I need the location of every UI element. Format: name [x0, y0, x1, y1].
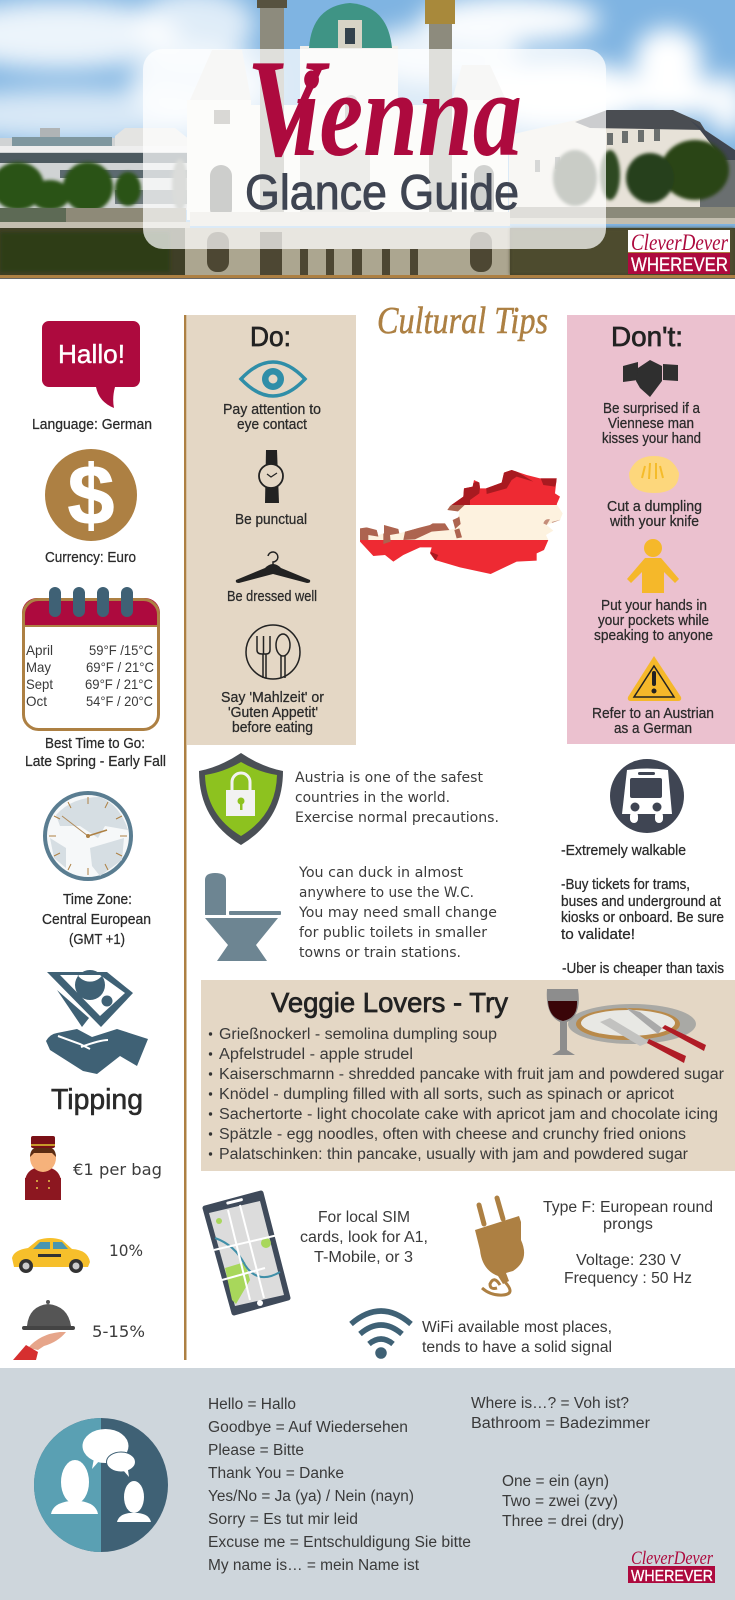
text: safety — [295, 770, 499, 826]
text: austrian: Refer to an Austrian — [592, 706, 714, 722]
text: power specs: Frequency : 50 Hz — [564, 1270, 692, 1287]
text: pockets: Put your hands in — [601, 598, 707, 614]
icon: phone with map — [205, 1193, 288, 1313]
text: kiss hand: Viennese man — [608, 416, 694, 432]
text: common phrases: Please = Bitte — [208, 1442, 304, 1459]
heading: do: Do: — [250, 321, 291, 352]
left column divider — [184, 315, 186, 1360]
text: power specs: prongs — [603, 1216, 653, 1233]
icon: person — [627, 539, 679, 593]
text: sim cards: T-Mobile, or 3 — [314, 1249, 413, 1266]
text: safety: Austria is one of the safest — [295, 770, 483, 786]
label: best time to go — [25, 736, 166, 770]
title: Vienna: ienna — [292, 47, 522, 182]
text: power specs: Voltage: 230 V — [576, 1252, 682, 1269]
text: bag tip: €1 per bag — [73, 1160, 162, 1179]
calendar with weather table: April — [26, 642, 53, 658]
list: veggie dishes: Kaiserschmarnn - shredded pancake with fruit jam and powdered sugar — [219, 1066, 724, 1083]
heading: tipping: Tipping — [51, 1084, 143, 1116]
text: mahlzeit: 'Guten Appetit' — [228, 705, 318, 721]
text: sim cards: For local SIM — [318, 1209, 410, 1226]
text: sim cards — [300, 1209, 428, 1266]
icon: dollar coin — [45, 448, 137, 542]
calendar with weather table: May — [26, 659, 51, 675]
text: common phrases: Thank You = Danke — [208, 1465, 344, 1482]
list: veggie dishes: Knödel - dumpling filled with all sorts, such as spinach or apricot — [219, 1086, 675, 1103]
text: eye contact — [223, 402, 321, 433]
text: mahlzeit — [221, 690, 324, 736]
right buildings — [509, 110, 735, 215]
text: common phrases: Goodbye = Auf Wiedersehen — [208, 1419, 408, 1436]
label: time zone: (GMT +1) — [69, 932, 125, 948]
label: language: Language: German — [32, 417, 152, 433]
text: kiss hand — [602, 401, 701, 447]
icon: two people talking — [34, 1418, 168, 1552]
text: transport: kiosks or onboard. Be sure — [561, 910, 724, 926]
icon: wall clock — [45, 793, 131, 879]
calendar with weather table: 69°F / 21°C — [86, 659, 154, 675]
text: transport: -Uber is cheaper than taxis — [562, 961, 724, 977]
map: Austria flag — [360, 470, 562, 574]
text: directions: Bathroom = Badezimmer — [471, 1415, 650, 1432]
list: veggie dishes — [209, 1026, 724, 1163]
logo: CleverDever Wherever (bottom) — [628, 1548, 715, 1585]
panel: don't — [567, 315, 735, 744]
text: taxi tip: 10% — [109, 1241, 143, 1260]
icon: fork and spoon — [246, 625, 300, 679]
text: kiss hand: Be surprised if a — [603, 401, 701, 417]
text: transport: -Buy tickets for trams, — [561, 877, 690, 893]
text: common phrases: Hello = Hallo — [208, 1396, 296, 1413]
text: numbers — [502, 1473, 624, 1530]
calendar with weather table: 54°F / 20°C — [86, 693, 153, 709]
text: transport: -Extremely walkable — [561, 843, 686, 859]
text: transport: buses and underground at — [561, 894, 721, 910]
logo: CleverDever Wherever (bottom): CleverDever — [631, 1548, 714, 1569]
text: punctual: Be punctual — [235, 512, 307, 528]
text: pockets: speaking to anyone — [594, 628, 713, 644]
heading: don't: Don't: — [611, 321, 683, 352]
trees left — [0, 159, 188, 212]
label: best time to go: Late Spring - Early Fall — [25, 754, 166, 770]
logo: CleverDever Wherever (top) — [628, 230, 730, 276]
text: transport — [561, 843, 724, 977]
text: austrian: as a German — [614, 721, 692, 737]
text: toilets — [298, 865, 497, 961]
panel: veggie lovers — [201, 980, 735, 1171]
icon: safety shield — [199, 753, 283, 845]
text: common phrases: My name is… = mein Name ist — [208, 1557, 420, 1574]
list: veggie dishes: Apfelstrudel - apple strudel — [219, 1046, 413, 1063]
list: veggie dishes: Spätzle - egg noodles, often with cheese and crunchy fried onions — [219, 1126, 686, 1143]
label: best time to go: Best Time to Go: — [45, 736, 145, 752]
icon: wristwatch — [259, 450, 283, 503]
text: transport: to validate! — [561, 927, 635, 943]
text: eye contact: Pay attention to — [223, 402, 321, 418]
list: veggie dishes: Sachertorte - light chocolate cake with apricot jam and chocolate icing — [219, 1106, 718, 1123]
text: power specs — [543, 1199, 713, 1287]
text: restaurant tip: 5-15% — [92, 1322, 145, 1341]
icon: speech bubble Hallo: Hallo! — [58, 339, 125, 369]
ground and water — [510, 207, 735, 218]
heading: veggie lovers: Veggie Lovers - Try — [271, 987, 508, 1018]
icon: warning triangle — [628, 656, 681, 701]
icon: bus — [610, 759, 684, 833]
text: directions — [471, 1395, 650, 1432]
label: time zone: Central European — [42, 912, 151, 928]
text: common phrases: Excuse me = Entschuldigung Sie bitte — [208, 1534, 471, 1551]
list: veggie dishes: Grießnockerl - semolina dumpling soup — [219, 1026, 497, 1043]
hero photo: Karlskirche with sky and reflection — [0, 0, 735, 279]
text: eye contact: eye contact — [237, 417, 307, 433]
icon: handshake — [623, 360, 678, 397]
icon: wine and plate — [547, 989, 706, 1063]
text: common phrases: Yes/No = Ja (ya) / Nein (nayn) — [208, 1488, 414, 1505]
icon: taxi — [12, 1238, 90, 1273]
text: wifi: tends to have a solid signal — [422, 1339, 612, 1356]
text: dress well: Be dressed well — [227, 589, 317, 605]
icon: electric plug — [475, 1198, 524, 1295]
translucent title panel — [143, 49, 606, 249]
church — [187, 0, 508, 225]
text: sim cards: cards, look for A1, — [300, 1229, 428, 1246]
text: dumpling: with your knife — [609, 514, 699, 530]
calendar with weather table: 69°F / 21°C — [85, 676, 153, 692]
text: pockets: your pockets while — [598, 613, 709, 629]
text: kiss hand: kisses your hand — [602, 431, 701, 447]
icon: hand receiving money — [46, 970, 148, 1074]
text: toilets: towns or train stations. — [299, 945, 461, 961]
text: common phrases — [208, 1396, 471, 1574]
icon: speech bubble Hallo — [42, 321, 140, 408]
label: time zone: Time Zone: — [63, 892, 132, 908]
icon: eye — [241, 362, 305, 396]
calendar with weather table: Oct — [26, 693, 47, 709]
text: toilets: You can duck in almost — [298, 865, 464, 881]
calendar with weather table: 59°F /15°C — [89, 642, 153, 658]
calendar with weather table: Sept — [26, 676, 53, 692]
icon: server cloche and hand — [13, 1300, 75, 1360]
text: wifi: WiFi available most places, — [422, 1319, 612, 1336]
text: common phrases: Sorry = Es tut mir leid — [208, 1511, 358, 1528]
icon: wifi — [351, 1311, 411, 1356]
label: currency: Currency: Euro — [45, 550, 136, 566]
text: numbers: Three = drei (dry) — [502, 1513, 624, 1530]
icon: toilet — [205, 873, 281, 961]
text: numbers: One = ein (ayn) — [502, 1473, 609, 1490]
icon: bellboy — [25, 1136, 61, 1200]
text: safety: Exercise normal precautions. — [295, 810, 499, 826]
title: Vienna — [246, 31, 522, 186]
title: Vienna: V — [246, 31, 330, 186]
text: toilets: for public toilets in smaller — [299, 925, 487, 941]
left buildings — [0, 128, 190, 210]
text: directions: Where is…? = Voh ist? — [471, 1395, 629, 1412]
text: mahlzeit: Say 'Mahlzeit' or — [221, 690, 324, 706]
calendar with weather table — [22, 587, 160, 730]
icon: dollar coin: $ — [68, 448, 114, 542]
text: power specs: Type F: European round — [543, 1199, 713, 1216]
title: Glance Guide: Glance Guide — [245, 166, 519, 220]
text: austrian — [592, 706, 714, 737]
panel: phrases — [0, 1368, 735, 1600]
heading: cultural tips: Cultural Tips — [377, 300, 548, 342]
icon: coat hanger — [236, 552, 310, 583]
text: safety: countries in the world. — [295, 790, 450, 806]
list: veggie dishes: Palatschinken: thin pancake, usually with jam and powdered sugar — [219, 1146, 688, 1163]
panel: do — [187, 315, 356, 745]
text: numbers: Two = zwei (zvy) — [502, 1493, 618, 1510]
text: toilets: anywhere to use the W.C. — [299, 885, 474, 901]
text: dumpling — [607, 499, 702, 530]
text: pockets — [594, 598, 713, 644]
text: wifi — [422, 1319, 612, 1356]
text: mahlzeit: before eating — [232, 720, 313, 736]
icon: dumpling — [629, 456, 679, 493]
text: dumpling: Cut a dumpling — [607, 499, 702, 515]
label: time zone — [42, 892, 151, 948]
text: toilets: You may need small change — [298, 905, 497, 921]
logo: CleverDever Wherever (bottom): WHEREVER — [631, 1568, 713, 1585]
